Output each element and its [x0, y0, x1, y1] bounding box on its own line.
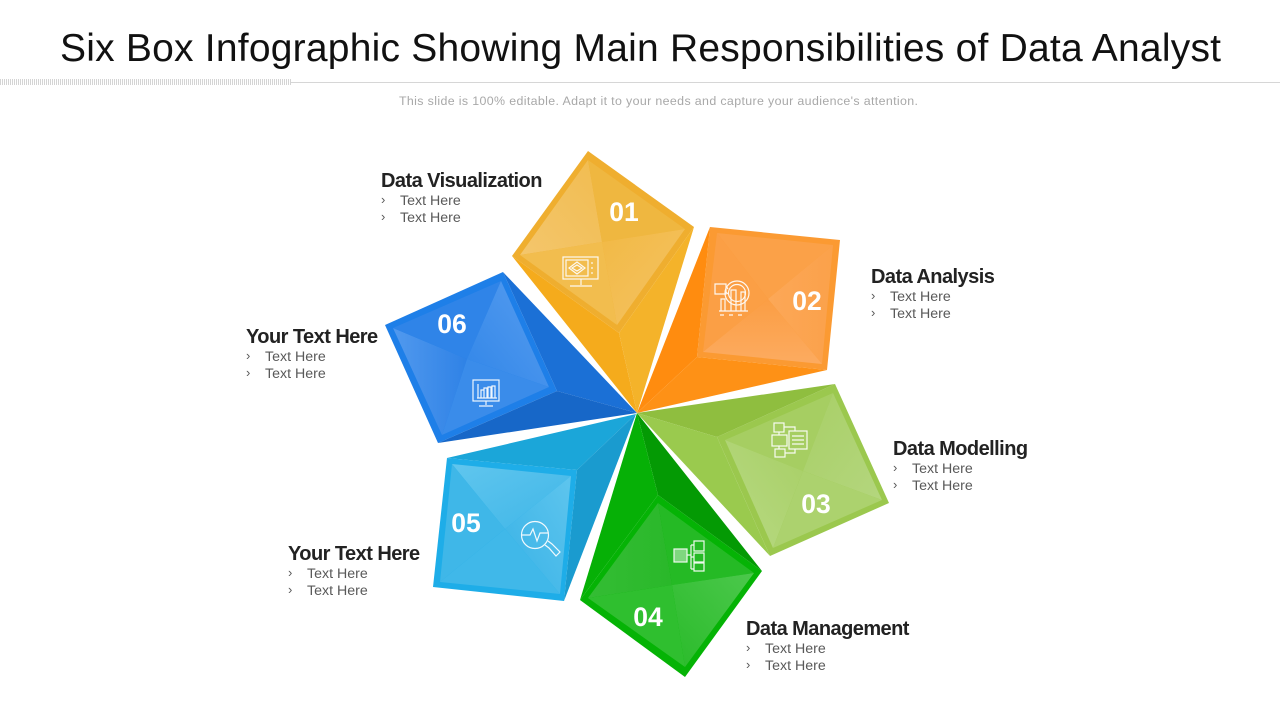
- label: Data Visualization: ›: [381, 209, 385, 224]
- box 01: amber: [512, 151, 694, 413]
- label: box 05 text: Text Here: [307, 583, 368, 599]
- box 06: blue: [385, 272, 637, 443]
- label: Data Analysis: [871, 266, 995, 322]
- number 04: 04: [633, 602, 663, 632]
- label: box 06 text: ›: [246, 348, 250, 363]
- label: box 06 text: Your Text Here: [246, 326, 378, 348]
- label: Data Modelling: Data Modelling: [893, 438, 1028, 460]
- label: Data Visualization: Text Here: [400, 210, 461, 226]
- label: box 05 text: Text Here: [307, 566, 368, 582]
- icon: magnifier pulse: [522, 522, 560, 556]
- label: Data Analysis: ›: [871, 288, 875, 303]
- label: Data Management: Text Here: [765, 658, 826, 674]
- label: Data Modelling: Text Here: [912, 478, 973, 494]
- number 03: 03: [801, 489, 831, 519]
- label: box 06 text: [246, 326, 378, 382]
- icon: bar chart monitor: [473, 380, 499, 406]
- label: Data Visualization: Text Here: [400, 193, 461, 209]
- label: Data Management: Data Management: [746, 618, 910, 640]
- number 02: 02: [792, 286, 822, 316]
- icon: 3D cube monitor: [563, 257, 598, 286]
- label: box 05 text: Your Text Here: [288, 543, 420, 565]
- label: box 06 text: Text Here: [265, 349, 326, 365]
- label: Data Management: ›: [746, 657, 750, 672]
- title: Six Box Infographic Showing Main Responsibilities of Data Analyst: [60, 27, 1221, 70]
- label: Data Visualization: Data Visualization: [381, 170, 542, 192]
- subtitle: This slide is 100% editable. Adapt it to your needs and capture your audience's attention.: [399, 94, 918, 108]
- label: Data Analysis: Text Here: [890, 289, 951, 305]
- label: box 05 text: ›: [288, 565, 292, 580]
- box 05: light blue: [433, 414, 636, 601]
- label: Data Modelling: [893, 438, 1028, 494]
- label: Data Management: [746, 618, 910, 674]
- label: Data Modelling: ›: [893, 477, 897, 492]
- number 01: 01: [609, 197, 639, 227]
- label: Data Visualization: [381, 170, 542, 226]
- label: Data Analysis: Data Analysis: [871, 266, 995, 288]
- header rule: [0, 79, 1280, 85]
- box 03: lime: [637, 384, 889, 556]
- label: box 05 text: [288, 543, 420, 599]
- label: Data Modelling: ›: [893, 460, 897, 475]
- label: Data Management: Text Here: [765, 641, 826, 657]
- label: box 05 text: ›: [288, 582, 292, 597]
- icon: folder tree: [674, 541, 704, 571]
- box 02: orange: [637, 227, 840, 413]
- icon: magnifier over bar chart: [715, 281, 749, 315]
- label: Data Analysis: Text Here: [890, 306, 951, 322]
- box 04: green: [580, 413, 762, 677]
- label: Data Management: ›: [746, 640, 750, 655]
- label: Data Visualization: ›: [381, 192, 385, 207]
- label: box 06 text: Text Here: [265, 366, 326, 382]
- number 06: 06: [437, 309, 467, 339]
- label: Data Analysis: ›: [871, 305, 875, 320]
- label: Data Modelling: Text Here: [912, 461, 973, 477]
- number 05: 05: [451, 508, 481, 538]
- icon: data flow diagram: [772, 423, 807, 457]
- label: box 06 text: ›: [246, 365, 250, 380]
